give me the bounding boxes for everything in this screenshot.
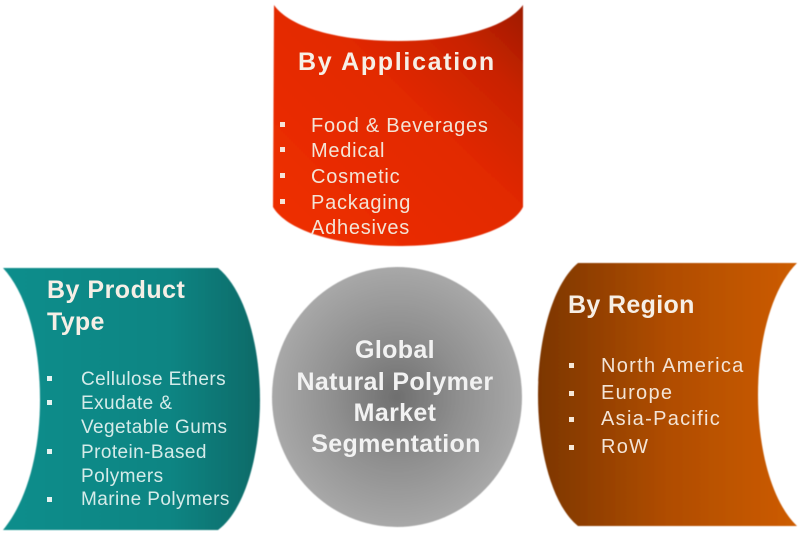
list: product types: Protein-Based: [81, 442, 207, 463]
list: product types: Polymers: [81, 466, 164, 487]
list: applications: Adhesives: [311, 217, 410, 239]
list: applications: Packaging: [311, 192, 411, 214]
cylinder shape: [273, 5, 523, 246]
list: product types: Cellulose Ethers: [81, 369, 226, 390]
heading: by product type: [47, 276, 186, 336]
list: product types: Vegetable Gums: [81, 417, 227, 438]
list: applications: Medical: [311, 140, 385, 162]
list: applications: Food & Beverages: [311, 115, 489, 137]
list: product types: [47, 369, 230, 510]
panel: center circle: [272, 267, 522, 527]
center title: Market: [354, 399, 437, 427]
heading: by product type: By Product: [47, 276, 186, 304]
list: product types: Marine Polymers: [81, 489, 230, 510]
center title: Natural Polymer: [296, 368, 494, 396]
center title: Segmentation: [311, 430, 481, 458]
list: regions: [569, 355, 745, 458]
heading: by product type: Type: [47, 308, 105, 336]
curved shape: [3, 268, 260, 530]
grey circle: [272, 267, 522, 527]
list: regions: North America: [601, 355, 745, 377]
list: regions: Asia-Pacific: [601, 408, 721, 430]
list: regions: Europe: [601, 382, 673, 404]
panel: by region: [538, 263, 797, 526]
panel: by application: [273, 5, 523, 246]
panel: by product type: [3, 268, 260, 530]
list: regions: RoW: [601, 436, 649, 458]
list: product types: Exudate &: [81, 393, 172, 414]
center title: [296, 336, 494, 458]
heading: by region: By Region: [568, 291, 695, 319]
curved shape: [538, 263, 797, 526]
list: applications: [280, 115, 489, 239]
heading: by application: By Application: [298, 48, 496, 76]
center title: Global: [355, 336, 435, 364]
list: applications: Cosmetic: [311, 166, 400, 188]
